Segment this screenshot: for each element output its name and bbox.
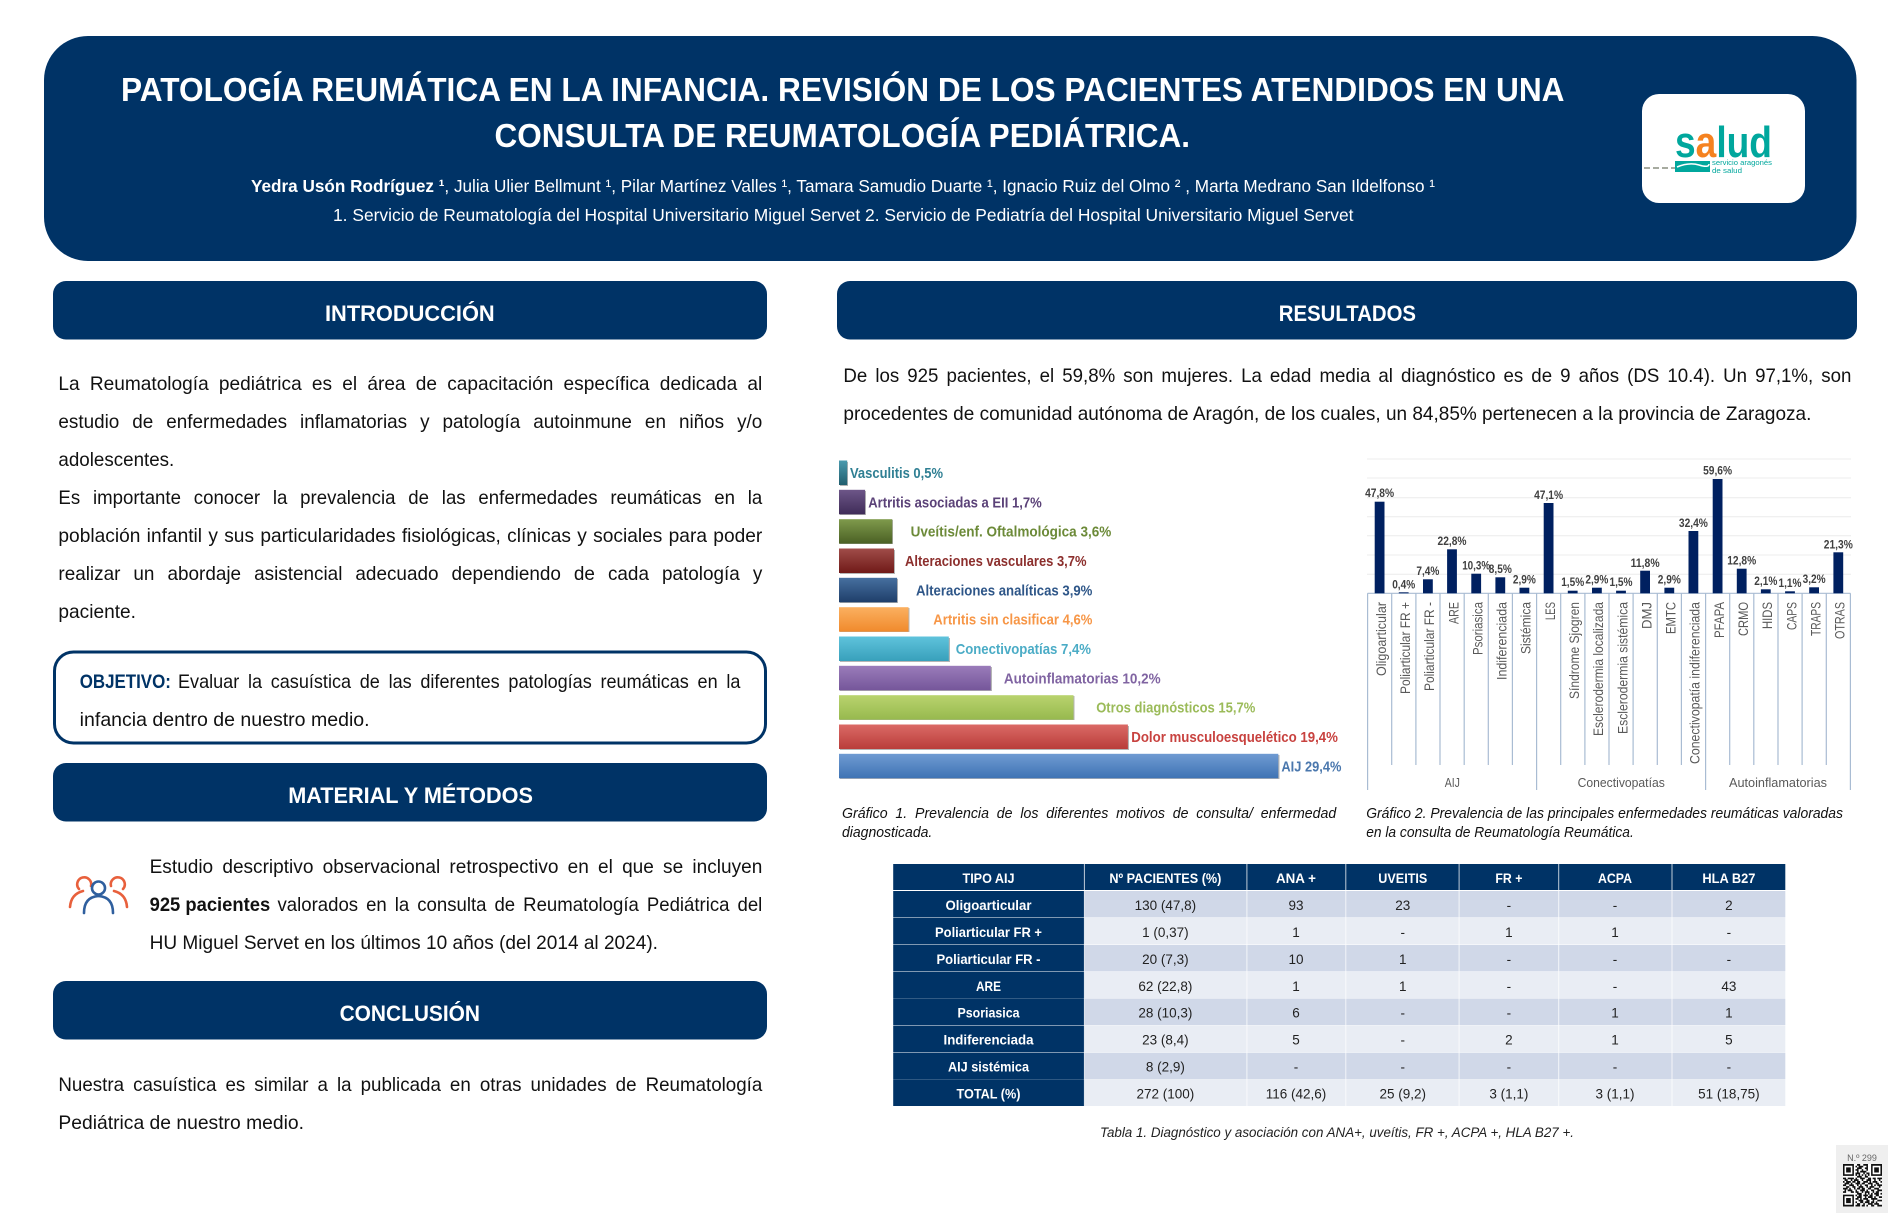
row: AIJ sistémica: -: [1507, 1060, 1511, 1075]
row: oligoarticular: -: [1613, 898, 1617, 913]
QR badge: [1836, 1145, 1888, 1213]
heading: resultados: RESULTADOS: [1279, 301, 1416, 326]
text block: introducción: realizar un abordaje asistencial adecuado dependiendo de cada patología y: [58, 563, 763, 585]
rotated category labels: Esclerodermia localizada: [1590, 602, 1606, 736]
rotated category labels: Esclerodermia sistémica: [1614, 602, 1630, 734]
text block: introducción: paciente.: [58, 601, 136, 623]
text block: material y métodos: Estudio descriptivo observacional retrospectivo en el que se incluyen: [150, 856, 762, 878]
logo: salud: servicio aragonés: [1712, 158, 1772, 167]
bar: autoinflamatorias: Autoinflamatorias 10,2%: [1004, 670, 1161, 687]
heading: material y métodos: MATERIAL Y MÉTODOS: [288, 783, 533, 808]
row: indiferenciada: [944, 1033, 1733, 1048]
rotated category labels: Psoriasica: [1470, 602, 1486, 655]
row: total: TOTAL (%): [956, 1086, 1020, 1101]
title: [121, 71, 1564, 155]
column value labels: 1,5%: [1610, 577, 1632, 589]
rotated category labels: PFAPA: [1711, 601, 1727, 638]
column value labels: 12,8%: [1727, 556, 1756, 568]
rotated category labels: EMTC: [1663, 602, 1679, 634]
column value labels: 22,8%: [1438, 536, 1466, 548]
row: poliarticular FR -: 20 (7,3): [1142, 952, 1189, 967]
table header row: ACPA: [1598, 871, 1632, 886]
row: oligoarticular: 2: [1725, 898, 1733, 913]
rotated category labels: OTRAS: [1832, 602, 1848, 639]
text block: conclusión: Pediátrica de nuestro medio.: [58, 1112, 304, 1134]
row: total: 116 (42,6): [1266, 1086, 1326, 1101]
callout: objetivo: OBJETIVO:: [80, 671, 171, 693]
text block: material y métodos: 925 pacientes: [150, 894, 270, 916]
rotated category labels: DMJ: [1638, 602, 1654, 629]
rotated category labels: LES: [1542, 602, 1558, 620]
row: ARE: [976, 979, 1736, 994]
text block: resultados: De los 925 pacientes, el 59,8% son mujeres. La edad media al diagnóstico es de 9 años (DS 10.4). Un 97,1%, son: [843, 365, 1851, 387]
text block: conclusión: [58, 1074, 762, 1134]
text block: introducción: estudio de enfermedades inflamatorias y patología autoinmune en niños y/o: [58, 411, 762, 433]
text block: resultados: [843, 365, 1851, 425]
caption: gráfico 1: diagnosticada.: [842, 825, 932, 841]
row: poliarticular FR -: -: [1727, 952, 1731, 967]
header banner: [44, 36, 1856, 261]
table header row: HLA B27: [1702, 871, 1755, 886]
text block: introducción: Es importante conocer la prevalencia de las enfermedades reumáticas en la: [58, 487, 762, 509]
text block: material y métodos: [150, 856, 762, 954]
column value labels: 59,6%: [1703, 466, 1732, 478]
rotated category labels: Poliarticular FR -: [1421, 602, 1437, 691]
bar: dolor musculoesquelético: [839, 724, 1338, 749]
row: AIJ sistémica: -: [1727, 1060, 1731, 1075]
bar: alteraciones vasculares: [839, 548, 1086, 573]
row: psoriasica: Psoriasica: [958, 1006, 1020, 1021]
row: indiferenciada: 1: [1611, 1033, 1619, 1048]
row: poliarticular FR +: [935, 925, 1731, 940]
bar: artritis asociadas a EII: Artritis asociadas a EII 1,7%: [868, 494, 1042, 511]
callout: objetivo: [54, 652, 766, 743]
panel: resultados: [837, 281, 1857, 425]
logo: salud: de salud: [1712, 166, 1742, 175]
caption: gráfico 2: Gráfico 2. Prevalencia de las principales enfermedades reumáticas valoradas: [1366, 806, 1843, 822]
callout: objetivo: infancia dentro de nuestro medio.: [80, 709, 370, 731]
column value labels: 10,3%: [1462, 560, 1490, 572]
bar: vasculitis: [839, 460, 943, 485]
rotated category labels: Indiferenciada: [1494, 602, 1510, 680]
column value labels: 2,9%: [1585, 574, 1608, 586]
panel: conclusión: [53, 981, 767, 1134]
column value labels: 2,9%: [1513, 574, 1536, 586]
columns: [1375, 479, 1843, 593]
row: psoriasica: 28 (10,3): [1138, 1006, 1192, 1021]
row: AIJ sistémica: -: [1401, 1060, 1405, 1075]
row: indiferenciada: 23 (8,4): [1142, 1033, 1189, 1048]
row: AIJ sistémica: -: [1613, 1060, 1617, 1075]
row: total: 25 (9,2): [1380, 1086, 1426, 1101]
text block: introducción: La Reumatología pediátrica es el área de capacitación específica dedicada al: [58, 373, 762, 395]
row: psoriasica: 1: [1725, 1006, 1733, 1021]
rotated category labels: CRMO: [1735, 602, 1751, 636]
logo: salud: [1642, 94, 1805, 203]
row: poliarticular FR -: -: [1613, 952, 1617, 967]
row: psoriasica: [958, 1006, 1733, 1021]
row: total: [956, 1086, 1760, 1101]
row: AIJ sistémica: [948, 1060, 1731, 1075]
bar: autoinflamatorias: [839, 666, 1161, 690]
table: tipo AIJ: [893, 864, 1785, 1106]
row: ARE: -: [1613, 979, 1617, 994]
table header row: UVEITIS: [1378, 871, 1427, 886]
rotated category labels: HIDS: [1759, 602, 1775, 629]
row: ARE: 1: [1292, 979, 1300, 994]
row: indiferenciada: Indiferenciada: [944, 1033, 1034, 1048]
bar: alteraciones vasculares: Alteraciones vasculares 3,7%: [905, 553, 1086, 570]
row: total: 3 (1,1): [1489, 1086, 1528, 1101]
row: oligoarticular: 23: [1395, 898, 1410, 913]
column value labels: 3,2%: [1803, 574, 1826, 586]
authors: Yedra Usón Rodríguez ¹, Julia Ulier Bellmunt ¹, Pilar Martínez Valles ¹, Tamara Samudio Duarte ¹, Ignacio Ruiz del Olmo ² , Marta Medrano San Ildelfonso ¹: [251, 176, 1435, 196]
icon: group of people: [70, 877, 127, 913]
row: total: 272 (100): [1137, 1086, 1194, 1101]
row: poliarticular FR -: [936, 952, 1731, 967]
rotated category labels: Conectivopatía indiferenciada: [1687, 602, 1703, 764]
row: poliarticular FR -: 10: [1288, 952, 1304, 967]
caption: gráfico 1: Gráfico 1. Prevalencia de los diferentes motivos de consulta/ enfermedad: [842, 806, 1337, 822]
table backgrounds: [893, 864, 1785, 1106]
table header row: ANA +: [1276, 871, 1316, 886]
column value labels: 1,1%: [1778, 578, 1802, 590]
logo: salud: salud: [1675, 118, 1772, 167]
row: total: 51 (18,75): [1698, 1086, 1760, 1101]
bar: uveítis: [839, 519, 1111, 544]
column value labels: 2,9%: [1658, 574, 1681, 586]
bar: alteraciones analíticas: Alteraciones analíticas 3,9%: [916, 582, 1092, 599]
text block: conclusión: Nuestra casuística es similar a la publicada en otras unidades de Reumatología: [58, 1074, 762, 1096]
row: poliarticular FR +: -: [1401, 925, 1405, 940]
row: AIJ sistémica: 8 (2,9): [1146, 1060, 1185, 1075]
row: ARE: -: [1507, 979, 1511, 994]
bar: dolor musculoesquelético: Dolor musculoesquelético 19,4%: [1131, 729, 1338, 746]
caption: tabla 1: Tabla 1. Diagnóstico y asociación con ANA+, uveítis, FR +, ACPA +, HLA B27 +.: [1100, 1125, 1574, 1140]
rotated category labels: [1373, 601, 1848, 764]
row: poliarticular FR +: 1: [1292, 925, 1300, 940]
row: poliarticular FR +: -: [1727, 925, 1731, 940]
row: ARE: 62 (22,8): [1138, 979, 1192, 994]
panel: material y métodos: [53, 763, 767, 954]
row: psoriasica: -: [1401, 1006, 1405, 1021]
bar: AIJ: [839, 754, 1341, 778]
bar: vasculitis: Vasculitis 0,5%: [850, 465, 943, 482]
column value labels: 47,1%: [1534, 490, 1563, 502]
rotated category labels: TRAPS: [1807, 602, 1823, 636]
column value labels: 21,3%: [1824, 540, 1853, 552]
text block: introducción: adolescentes.: [58, 449, 174, 471]
row: poliarticular FR +: 1 (0,37): [1142, 925, 1189, 940]
row: oligoarticular: [946, 898, 1733, 913]
column value labels: 8,5%: [1489, 564, 1512, 576]
caption: gráfico 2: [1366, 806, 1843, 841]
rotated category labels: ARE: [1445, 602, 1461, 624]
row: oligoarticular: Oligoarticular: [946, 898, 1032, 913]
column value labels: 32,4%: [1679, 518, 1708, 530]
rotated category labels: Síndrome Sjogren: [1566, 602, 1582, 699]
QR badge: N.º 299: [1847, 1153, 1877, 1163]
text block: introducción: [58, 373, 763, 623]
column value labels: 0,4%: [1392, 580, 1415, 592]
icon: QR code: [1843, 1164, 1882, 1206]
caption: gráfico 1: [842, 806, 1337, 841]
bar: artritis asociadas a EII: [839, 490, 1042, 514]
text block: material y métodos: valorados en la consulta de Reumatología Pediátrica del: [278, 894, 762, 916]
row: psoriasica: 6: [1292, 1006, 1300, 1021]
row: poliarticular FR -: -: [1507, 952, 1511, 967]
affiliations: 1. Servicio de Reumatología del Hospital Universitario Miguel Servet 2. Servicio de Pediatría del Hospital Universitario Miguel Servet: [333, 205, 1354, 225]
row: indiferenciada: 5: [1292, 1033, 1300, 1048]
row: psoriasica: 1: [1611, 1006, 1619, 1021]
group labels: [1445, 775, 1827, 790]
heading: introducción: [53, 281, 767, 340]
bar: otros diagnósticos: Otros diagnósticos 15,7%: [1096, 700, 1255, 717]
callout: objetivo: Evaluar la casuística de las diferentes patologías reumáticas en la: [178, 671, 741, 693]
bar: alteraciones analíticas: [839, 578, 1092, 602]
table header row: FR +: [1495, 871, 1522, 886]
row: poliarticular FR -: Poliarticular FR -: [936, 952, 1040, 967]
caption: gráfico 2: en la consulta de Reumatología Reumática.: [1366, 825, 1634, 841]
row: total: 3 (1,1): [1595, 1086, 1635, 1101]
rotated category labels: Poliarticular FR +: [1397, 602, 1413, 694]
bar: artritis sin clasificar: Artritis sin clasificar 4,6%: [933, 612, 1092, 629]
title: CONSULTA DE REUMATOLOGÍA PEDIÁTRICA.: [494, 117, 1190, 155]
chart: gráfico 2 column chart: [1365, 459, 1853, 790]
group labels: Autoinflamatorias: [1729, 775, 1827, 790]
text block: introducción: población infantil y sus particularidades fisiológicas, clínicas y sociales para poder: [58, 525, 763, 547]
table header row: [962, 871, 1755, 886]
rotated category labels: CAPS: [1783, 602, 1799, 630]
column value labels: 1,5%: [1561, 577, 1584, 589]
heading: conclusión: [53, 981, 767, 1040]
row: indiferenciada: -: [1401, 1033, 1405, 1048]
bar: conectivopatías: [839, 636, 1091, 661]
rotated category labels: Sistémica: [1518, 602, 1534, 654]
heading: conclusión: CONCLUSIÓN: [340, 1001, 480, 1026]
row: AIJ sistémica: -: [1294, 1060, 1298, 1075]
column value labels: 11,8%: [1631, 558, 1660, 570]
column value labels: 7,4%: [1416, 566, 1439, 578]
row: poliarticular FR -: 1: [1399, 952, 1407, 967]
bar: artritis sin clasificar: [839, 607, 1092, 632]
heading: material y métodos: [53, 763, 767, 822]
row: psoriasica: -: [1507, 1006, 1511, 1021]
row: oligoarticular: 130 (47,8): [1135, 898, 1196, 913]
chart: gráfico 1 horizontal bars: [839, 460, 1341, 779]
row: ARE: 43: [1721, 979, 1736, 994]
column value labels: [1365, 466, 1853, 592]
text block: material y métodos: HU Miguel Servet en los últimos 10 años (del 2014 al 2024).: [150, 932, 658, 954]
row: indiferenciada: 2: [1505, 1033, 1513, 1048]
row: oligoarticular: -: [1507, 898, 1511, 913]
panel: introducción: [53, 281, 767, 623]
group labels: Conectivopatías: [1578, 775, 1665, 790]
bar: uveítis: Uveítis/enf. Oftalmológica 3,6%: [911, 524, 1111, 541]
heading: resultados: [837, 281, 1857, 340]
title: PATOLOGÍA REUMÁTICA EN LA INFANCIA. REVISIÓN DE LOS PACIENTES ATENDIDOS EN UNA: [121, 71, 1564, 109]
table header row: TIPO AIJ: [962, 871, 1014, 886]
group labels: AIJ: [1445, 775, 1460, 790]
row: oligoarticular: 93: [1288, 898, 1304, 913]
row: indiferenciada: 5: [1725, 1033, 1733, 1048]
heading: introducción: INTRODUCCIÓN: [325, 301, 495, 326]
column value labels: 2,1%: [1754, 576, 1777, 588]
row: AIJ sistémica: AIJ sistémica: [948, 1060, 1029, 1075]
rotated category labels: Oligoarticular: [1373, 602, 1389, 676]
bar: conectivopatías: Conectivopatías 7,4%: [956, 641, 1091, 658]
row: poliarticular FR +: 1: [1611, 925, 1619, 940]
bar: AIJ: AIJ 29,4%: [1281, 758, 1341, 775]
row: poliarticular FR +: 1: [1505, 925, 1513, 940]
text block: resultados: procedentes de comunidad autónoma de Aragón, de los cuales, un 84,85% pertenecen a la provincia de Zaragoza.: [843, 403, 1811, 425]
row: poliarticular FR +: Poliarticular FR +: [935, 925, 1042, 940]
table header row: Nº PACIENTES (%): [1109, 871, 1221, 886]
row: ARE: ARE: [976, 979, 1001, 994]
bar: otros diagnósticos: [839, 695, 1255, 720]
row: ARE: 1: [1399, 979, 1407, 994]
column value labels: 47,8%: [1365, 488, 1394, 500]
